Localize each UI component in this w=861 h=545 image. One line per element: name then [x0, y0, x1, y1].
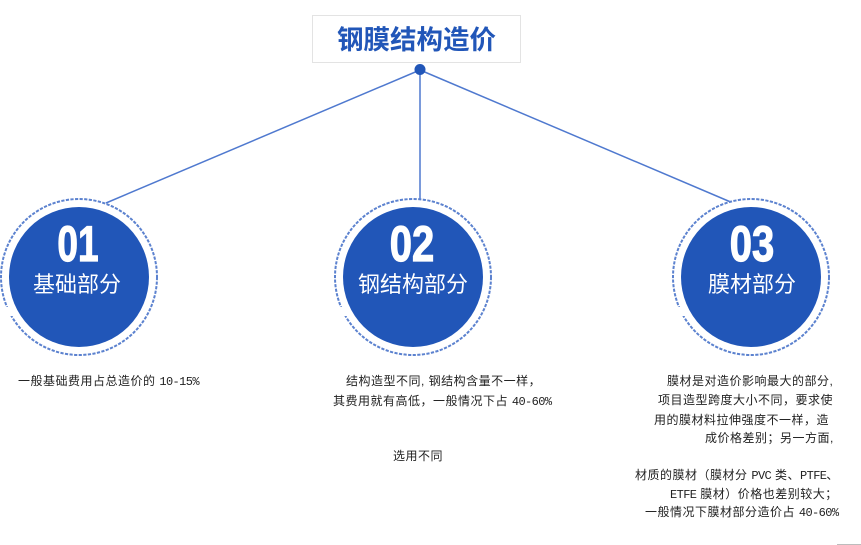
text block: steel structure [333, 374, 552, 463]
text block: membrane: 膜材是对造价影响最大的部分, [667, 374, 833, 388]
text block: membrane: 一般情况下膜材部分造价占 40-60% [645, 505, 838, 520]
text block: steel structure: 选用不同 [393, 449, 443, 463]
text block: membrane: 成价格差别；另一方面, [705, 431, 834, 445]
text block: membrane: ETFE 膜材）价格也差别较大； [670, 487, 838, 502]
circle 03 [673, 199, 829, 355]
text block: membrane: 项目造型跨度大小不同，要求使 [658, 393, 833, 407]
title [312, 15, 521, 63]
title: 钢膜结构造价 [337, 25, 496, 55]
text block: steel structure: 结构造型不同, 钢结构含量不一样， [346, 374, 541, 388]
circle 01 [1, 199, 157, 355]
number 03: 03 [730, 216, 774, 272]
label: 钢结构部分: 钢结构部分 [358, 272, 468, 297]
hub dot [414, 64, 426, 75]
text block: foundation: 一般基础费用占总造价的 10-15% [18, 374, 199, 389]
number 01: 01 [57, 216, 99, 272]
connector lines [106, 70, 733, 203]
text block: membrane [635, 374, 840, 520]
label: 基础部分: 基础部分 [33, 272, 121, 297]
circle 02 [335, 199, 491, 355]
text block: steel structure: 其费用就有高低，一般情况下占 40-60% [333, 394, 551, 409]
number 02: 02 [390, 216, 434, 272]
text block: membrane: 材质的膜材（膜材分 PVC 类、PTFE、 [635, 468, 839, 483]
text block: membrane: 用的膜材料拉伸强度不一样，造 [654, 413, 829, 427]
label: 膜材部分: 膜材部分 [708, 272, 796, 297]
